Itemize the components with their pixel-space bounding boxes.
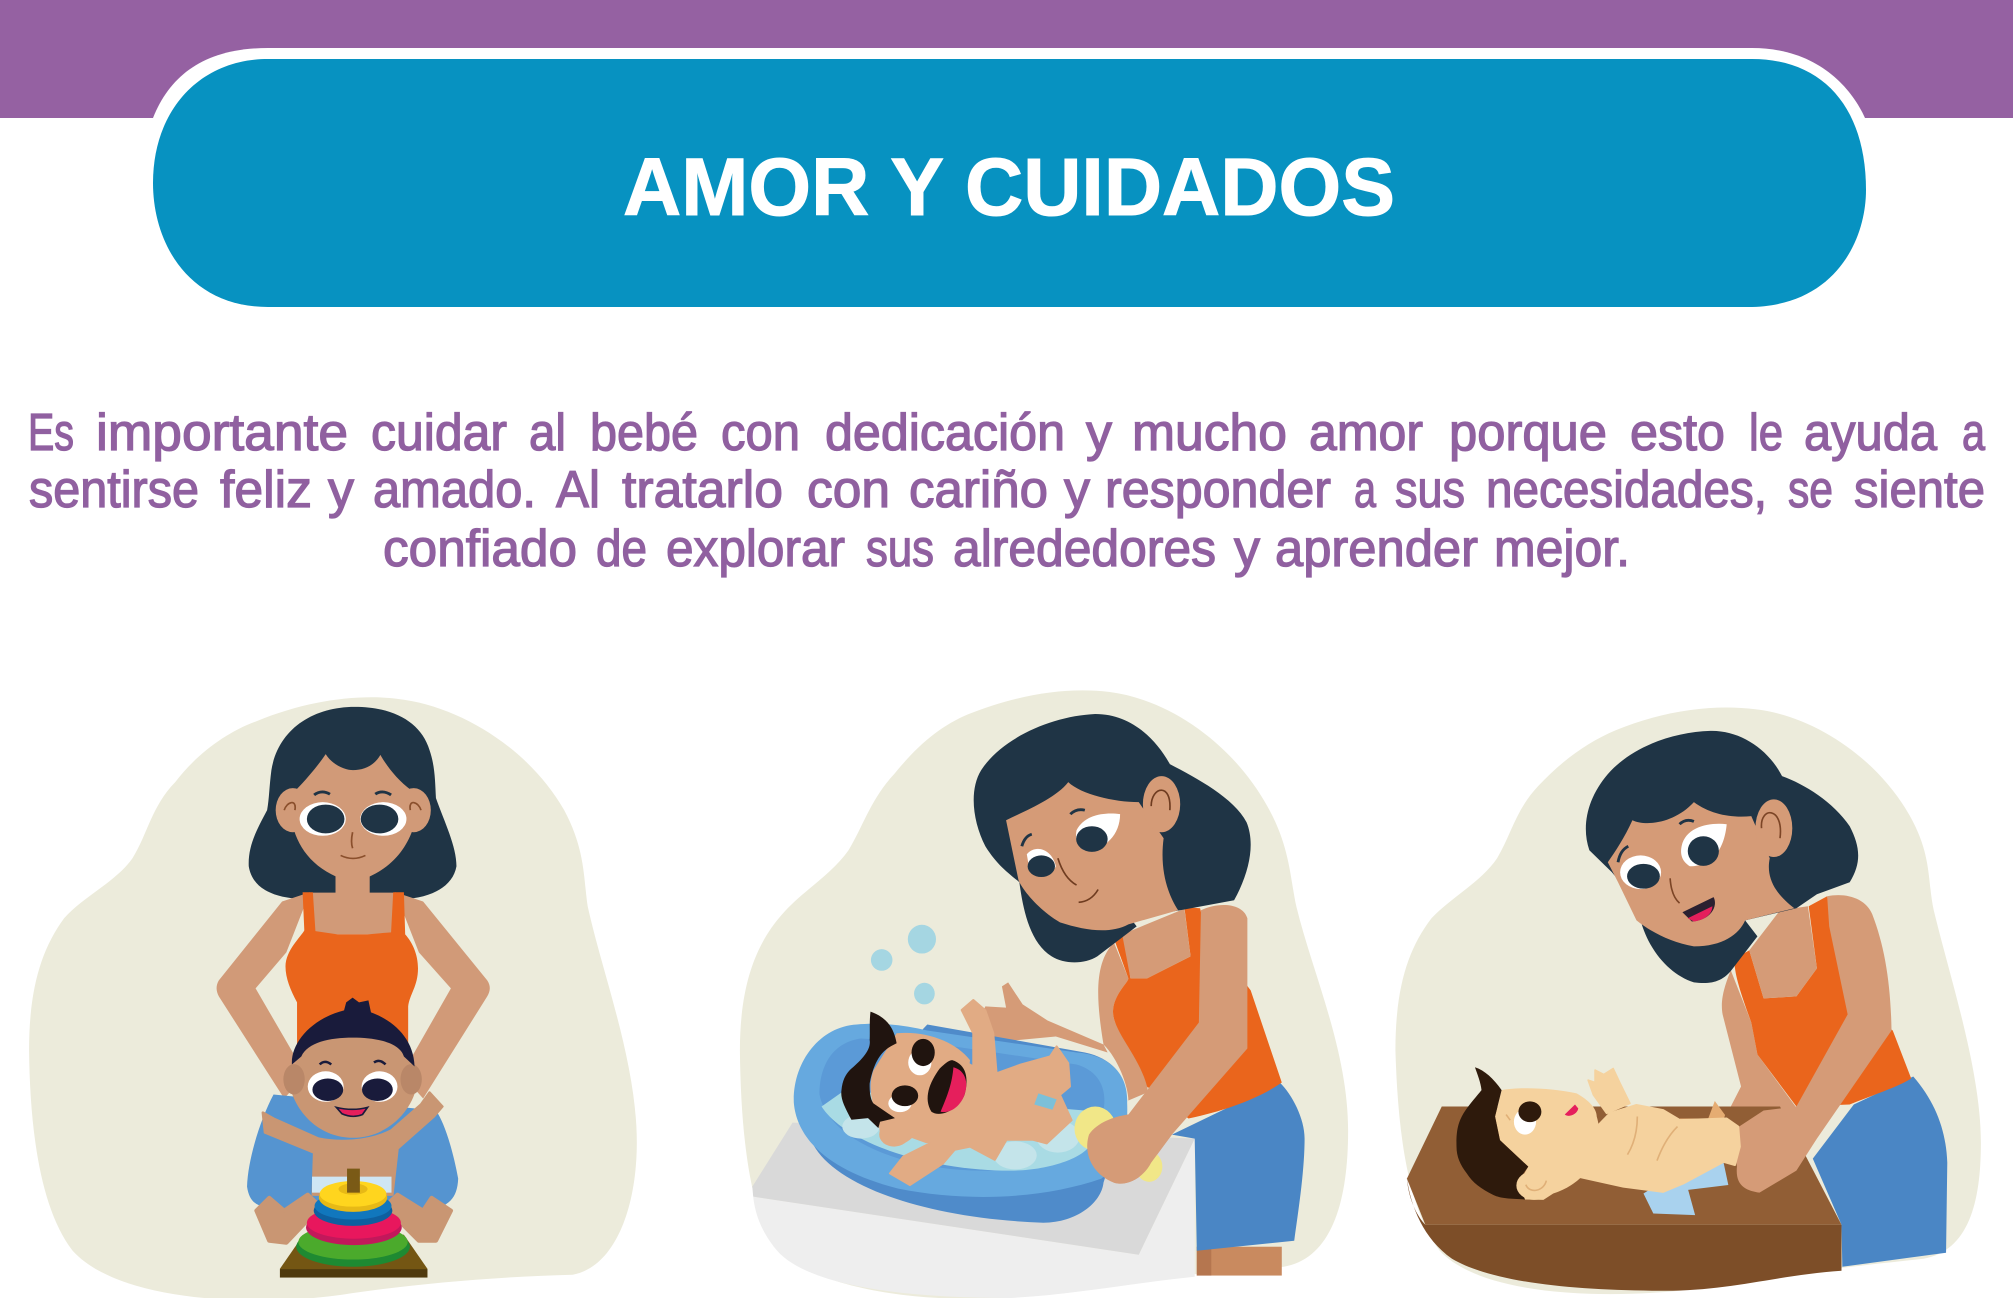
mother eyes — [1027, 814, 1120, 877]
mother chest — [1122, 909, 1191, 978]
intro text block: cuidar — [371, 404, 507, 462]
title: AMOR Y CUIDADOS — [623, 142, 1395, 233]
mother hair — [1586, 731, 1858, 983]
illustration: mother bathing baby — [740, 690, 1348, 1298]
baby head — [871, 1033, 970, 1146]
baby body and arms — [263, 1093, 442, 1195]
baby arm — [1588, 1068, 1630, 1113]
baby creases — [1506, 1115, 1678, 1190]
mother blue pants — [247, 1095, 458, 1211]
mother face — [294, 754, 412, 882]
intro text block: se — [1788, 461, 1833, 519]
intro text block: porque — [1449, 404, 1607, 462]
mother eyes — [300, 802, 406, 836]
intro text block: responder — [1105, 461, 1331, 519]
intro text block: necesidades, — [1486, 461, 1767, 519]
mother brows — [1022, 810, 1085, 846]
mother face — [1006, 782, 1178, 930]
tub inner — [820, 1038, 1104, 1171]
mother orange top — [1735, 896, 1911, 1107]
mother brows — [1618, 820, 1694, 862]
mother eyes — [1620, 824, 1727, 889]
mother hair — [974, 714, 1251, 962]
header purple band — [0, 0, 2013, 118]
yellow sponge — [1074, 1107, 1162, 1182]
mother hand over sponge — [1087, 1115, 1172, 1184]
stacking toy base — [280, 1235, 427, 1278]
table front — [753, 1139, 1195, 1298]
intro text block: aprender — [1275, 520, 1478, 578]
intro text block: sentirse — [29, 461, 199, 519]
background blob — [740, 690, 1348, 1298]
mother nose and mouth — [1058, 790, 1170, 902]
baby eyes — [308, 1071, 397, 1102]
baby mouth — [336, 1107, 368, 1116]
foam — [842, 1115, 1079, 1169]
mother ear — [1143, 776, 1180, 832]
intro text block: siente — [1854, 461, 1985, 519]
intro text block: Es — [28, 404, 74, 462]
mother ear — [1755, 799, 1792, 857]
baby diaper — [1643, 1160, 1728, 1215]
intro text block: tratarlo — [622, 461, 783, 519]
intro text block: sus — [1395, 461, 1465, 519]
intro text block: le — [1749, 404, 1783, 462]
baby brows — [320, 1061, 386, 1064]
baby mouth — [1565, 1105, 1578, 1116]
intro text block: de — [596, 520, 647, 578]
baby legs — [256, 1195, 451, 1243]
bubbles — [871, 925, 936, 1004]
baby ear — [1516, 1171, 1552, 1200]
intro text block: y — [1064, 461, 1090, 519]
intro text block: y — [1234, 520, 1260, 578]
mother nose and mouth — [284, 803, 421, 858]
baby ears — [283, 1064, 422, 1095]
mother skirt — [1172, 1083, 1305, 1251]
mother front arm and hand — [1736, 895, 1892, 1193]
mother legs — [1197, 1247, 1282, 1276]
intro text block: con — [721, 404, 800, 462]
illustration: mother changing baby diaper — [1395, 707, 1981, 1294]
baby eye — [1514, 1101, 1541, 1135]
baby eyes — [888, 1039, 935, 1112]
intro text block: mejor. — [1494, 520, 1630, 578]
intro text block: feliz — [220, 461, 312, 519]
mother front arm — [1087, 905, 1247, 1184]
illustration: mother and baby playing with stacking toy — [29, 697, 637, 1298]
intro text block: confiado — [383, 520, 577, 578]
baby body and limbs — [890, 1000, 1072, 1185]
intro text block: explorar — [666, 520, 845, 578]
title pill — [153, 59, 1866, 307]
intro text block: amado. — [373, 461, 536, 519]
baby body — [1571, 1105, 1740, 1192]
mother arms — [217, 892, 490, 1099]
baby foot — [1680, 1101, 1725, 1130]
baby mouth — [928, 1060, 967, 1114]
mother hair — [249, 707, 456, 899]
pill white outline — [153, 48, 1865, 330]
mother mouth — [1682, 897, 1715, 922]
mother neck and chest — [310, 870, 395, 934]
intro text block: sus — [866, 520, 934, 578]
intro text block: a — [1962, 404, 1985, 462]
changing table top — [1407, 1107, 1842, 1225]
baby head — [1495, 1088, 1599, 1200]
mother orange top — [286, 892, 418, 1054]
baby hair — [1456, 1067, 1528, 1199]
intro text block: y — [328, 461, 354, 519]
tub outer — [813, 1024, 1127, 1223]
background blob — [29, 697, 637, 1298]
mother face — [1608, 802, 1794, 946]
mother orange top — [1113, 907, 1282, 1119]
intro text block: al — [529, 404, 566, 462]
baby diaper strip — [1034, 1093, 1057, 1110]
intro text block: dedicación — [825, 404, 1065, 462]
mother ears — [276, 788, 431, 832]
changing table front — [1407, 1179, 1842, 1291]
mother chest — [1749, 906, 1817, 998]
baby hair — [292, 998, 415, 1066]
mother forearm and hand — [982, 982, 1108, 1052]
intro text block: a — [1354, 461, 1376, 519]
intro text block: y — [1086, 404, 1112, 462]
baby hair — [841, 1012, 897, 1128]
intro text block: esto — [1630, 404, 1725, 462]
background blob — [1395, 707, 1981, 1294]
tub rim — [794, 1024, 1127, 1197]
stacking toy rings — [296, 1169, 410, 1267]
mother skirt — [1813, 1077, 1947, 1267]
intro text block: ayuda — [1804, 404, 1937, 462]
intro text block: bebé — [590, 404, 698, 462]
mother back arm — [1722, 970, 1798, 1111]
intro text block: alrededores — [953, 520, 1216, 578]
intro text block: amor — [1309, 404, 1423, 462]
intro text block: mucho — [1132, 404, 1287, 462]
intro text block — [28, 404, 1985, 578]
intro text block: Al — [556, 461, 600, 519]
mother nose and ear line — [1670, 813, 1780, 903]
intro text block: importante — [96, 404, 348, 462]
water — [822, 1091, 1089, 1171]
mother brows — [314, 792, 391, 795]
intro text block: cariño — [909, 461, 1048, 519]
baby ear — [879, 1123, 909, 1147]
intro text block: con — [807, 461, 890, 519]
table top — [752, 1123, 1195, 1255]
baby head — [290, 1032, 417, 1138]
mother upper back arm — [1098, 942, 1149, 1101]
baby diaper — [312, 1177, 391, 1193]
